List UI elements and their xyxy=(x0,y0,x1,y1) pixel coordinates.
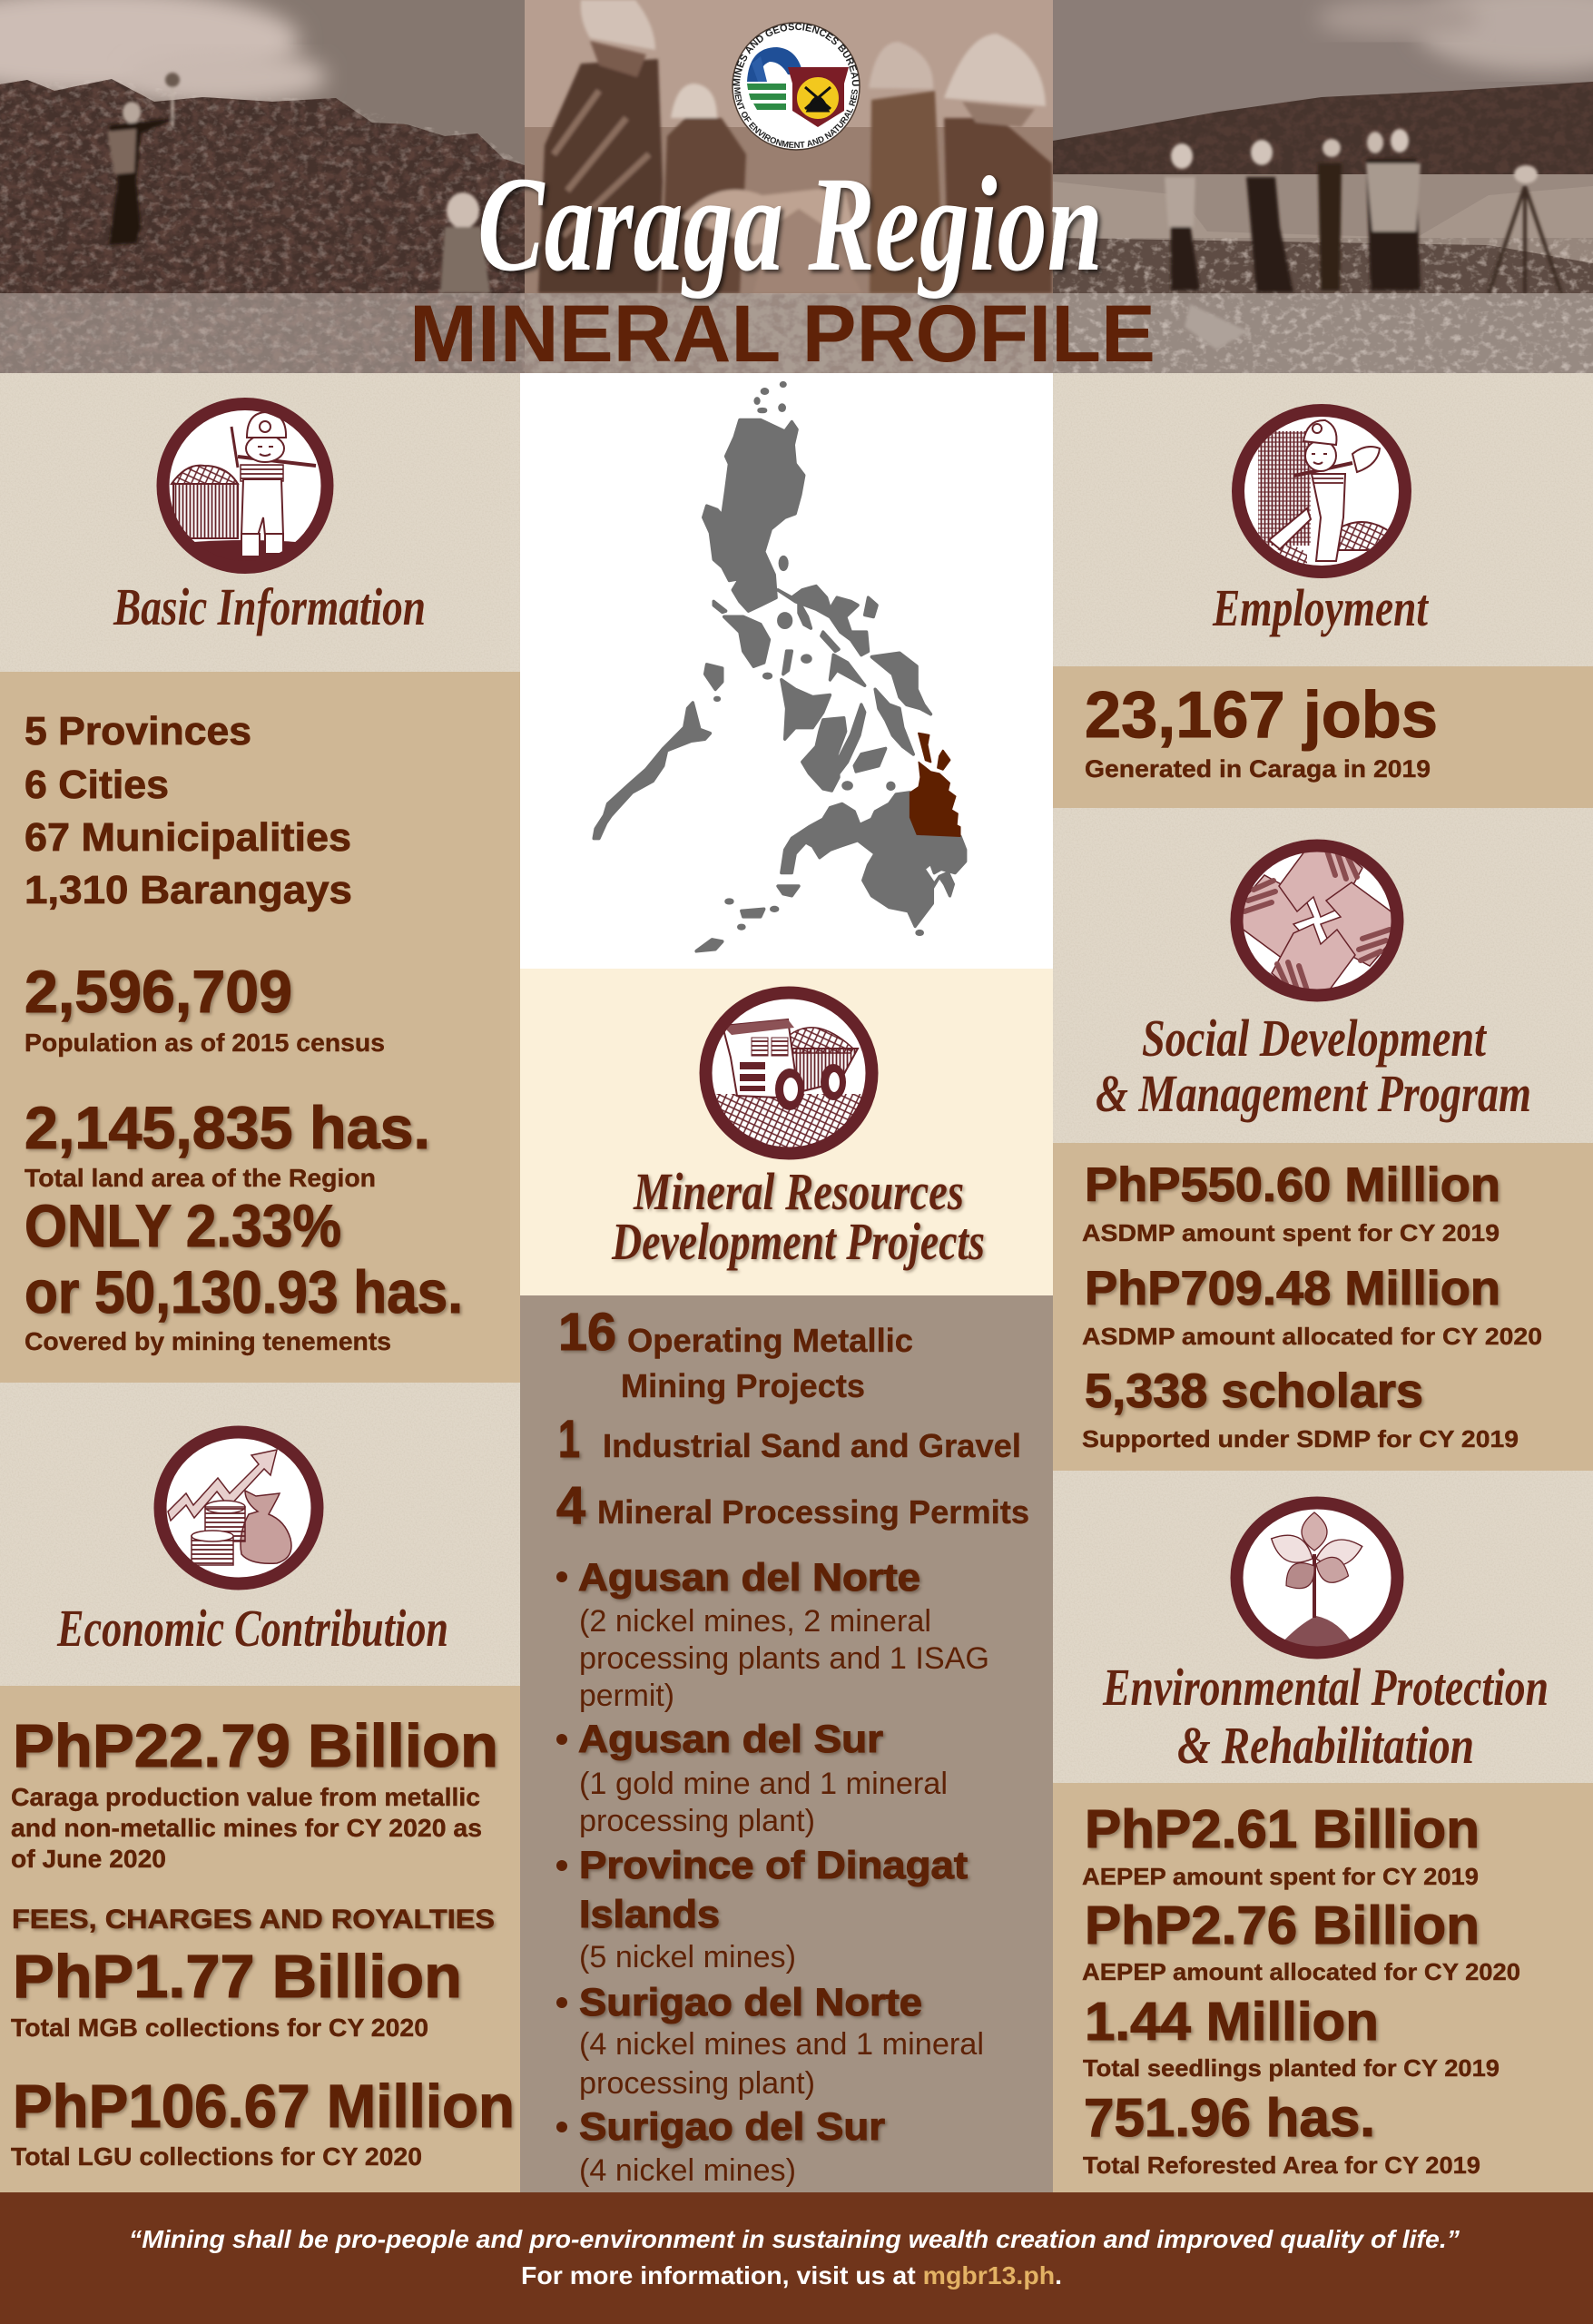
stat: AEPEP spent: AEPEP amount spent for CY 2019 xyxy=(1082,1863,1479,1890)
list: Province of Dinagat Islands xyxy=(556,1844,968,1974)
heading: Social Development & Management Program xyxy=(1096,1009,1531,1123)
stat: LGU collections xyxy=(11,2073,515,2171)
stat: population xyxy=(25,958,385,1057)
logo: MGB and DENR seal: MINES AND GEOSCIENCES BUREAU xyxy=(733,23,859,86)
list: Agusan del Norte: permit) xyxy=(579,1679,674,1713)
stat: seedlings planted: 1.44 Million xyxy=(1085,1992,1379,2052)
stat: MGB collections: Total MGB collections for CY 2020 xyxy=(11,2014,428,2042)
stat: mining tenements: Covered by mining tenements xyxy=(25,1327,391,1355)
list: Agusan del Norte: Agusan del Norte xyxy=(578,1556,920,1600)
text: administrative counts xyxy=(25,709,352,912)
list: Province of Dinagat Islands: Province of Dinagat xyxy=(579,1844,968,1887)
list: Agusan del Norte: processing plants and 1 ISAG xyxy=(579,1641,989,1676)
stat: ASDMP allocated: PhP709.48 Million xyxy=(1085,1262,1500,1315)
stat: ASDMP allocated xyxy=(1082,1262,1542,1350)
stat: population: 2,596,709 xyxy=(25,958,292,1025)
stat: AEPEP spent: PhP2.61 Billion xyxy=(1085,1799,1480,1859)
stat: ASDMP spent xyxy=(1082,1158,1500,1246)
stat: mining tenements: or 50,130.93 has. xyxy=(25,1258,463,1325)
stat: reforested area: Total Reforested Area for CY 2019 xyxy=(1083,2152,1480,2179)
stat: metallic mining projects: 16 xyxy=(558,1303,616,1362)
stat: sand and gravel xyxy=(558,1410,1021,1469)
stat: AEPEP allocated: AEPEP amount allocated for CY 2020 xyxy=(1082,1958,1520,1985)
stat: land area xyxy=(25,1094,430,1192)
stat: sand and gravel: 1 xyxy=(558,1410,580,1469)
list: Surigao del Norte: processing plant) xyxy=(579,2066,815,2101)
list: Agusan del Norte xyxy=(556,1556,989,1713)
title: Caraga Region: Caraga Region xyxy=(477,149,1103,300)
list: Surigao del Sur: Surigao del Sur xyxy=(579,2105,885,2149)
list: Surigao del Norte xyxy=(556,1981,984,2101)
panel: social development facts xyxy=(1053,1143,1593,1471)
icon: clasped hands xyxy=(1236,844,1398,997)
icon: seedling on soil mound xyxy=(1236,1503,1398,1657)
panel: economic contribution facts xyxy=(0,1686,520,2192)
stat: processing permits: 4 xyxy=(556,1476,585,1535)
panel: mineral resources development projects header xyxy=(520,969,1053,1295)
map: Philippines with Caraga highlighted xyxy=(520,373,1053,969)
list: Agusan del Sur: processing plant) xyxy=(579,1804,815,1838)
icon: rising arrow, coins and money bag xyxy=(160,1433,318,1583)
stat: scholars: 5,338 scholars xyxy=(1085,1364,1423,1418)
heading: Environmental Protection & Rehabilitation xyxy=(1102,1658,1549,1775)
stat: reforested area: 751.96 has. xyxy=(1084,2088,1375,2148)
list: Agusan del Norte: (2 nickel mines, 2 mineral xyxy=(579,1604,931,1639)
stat: AEPEP allocated: PhP2.76 Billion xyxy=(1085,1896,1480,1955)
title: Mineral Profile: MINERAL PROFILE xyxy=(409,288,1155,379)
panel: basic information facts xyxy=(0,672,520,1383)
footer: quote and website xyxy=(0,2192,1593,2324)
stat: sand and gravel: Industrial Sand and Gravel xyxy=(603,1427,1021,1464)
stat: production value: of June 2020 xyxy=(11,1845,166,1873)
banner: photo header xyxy=(0,0,1593,379)
photo: surveyor on rock pile xyxy=(0,0,525,373)
caption: jobs: Generated in Caraga in 2019 xyxy=(1085,755,1431,783)
stat: mining tenements: ONLY 2.33% xyxy=(25,1192,341,1259)
panel: social development header xyxy=(1053,808,1593,1143)
stat: seedlings planted xyxy=(1083,1992,1500,2082)
panel: environmental protection facts xyxy=(1053,1783,1593,2192)
stat: production value xyxy=(11,1712,498,1873)
icon: miner with shovel and wheelbarrow xyxy=(1238,410,1405,572)
heading: Employment: Employment xyxy=(1212,578,1429,637)
list: Surigao del Sur xyxy=(556,2105,885,2188)
panel: mineral resources facts xyxy=(520,1295,1053,2192)
stat: production value: Caraga production value from metallic xyxy=(11,1783,480,1811)
heading: Mineral Resources Development Projects: Mineral Resources xyxy=(633,1162,964,1221)
stat: LGU collections: Total LGU collections for CY 2020 xyxy=(11,2142,422,2171)
list: Surigao del Norte: (4 nickel mines and 1 mineral xyxy=(579,2027,984,2062)
text: administrative counts: 67 Municipalities xyxy=(25,815,351,860)
stat: metallic mining projects xyxy=(558,1303,913,1404)
list: Province of Dinagat Islands: Islands xyxy=(579,1893,720,1936)
list: Agusan del Sur: Agusan del Sur xyxy=(578,1718,883,1761)
text: administrative counts: 5 Provinces xyxy=(25,709,251,753)
text: administrative counts: 1,310 Barangays xyxy=(25,868,352,912)
list: Agusan del Sur: (1 gold mine and 1 mineral xyxy=(579,1767,948,1801)
stat: metallic mining projects: Mining Projects xyxy=(621,1367,865,1404)
stat: ASDMP spent: PhP550.60 Million xyxy=(1085,1158,1500,1212)
stat: metallic mining projects: Operating Metallic xyxy=(627,1322,913,1359)
heading: Mineral Resources Development Projects: Development Projects xyxy=(611,1212,985,1271)
stat: processing permits: Mineral Processing Permits xyxy=(597,1493,1029,1531)
subheading: fees, charges and royalties: FEES, CHARGES AND ROYALTIES xyxy=(12,1905,495,1935)
icon: dump truck xyxy=(706,993,871,1153)
panel: basic information header xyxy=(0,373,520,672)
heading: Mineral Resources Development Projects xyxy=(611,1162,985,1271)
stat: scholars: Supported under SDMP for CY 2019 xyxy=(1082,1425,1519,1452)
list: Surigao del Norte: Surigao del Norte xyxy=(579,1981,922,2024)
stat: ASDMP allocated: ASDMP amount allocated for CY 2020 xyxy=(1082,1323,1542,1350)
panel: employment header xyxy=(1053,373,1593,666)
list: Agusan del Sur xyxy=(556,1718,948,1838)
quote: “Mining shall be pro-people and pro-environment in sustaining wealth creation and improved quality of life.” xyxy=(129,2225,1460,2253)
text: administrative counts: 6 Cities xyxy=(25,763,169,807)
stat: ASDMP spent: ASDMP amount spent for CY 2019 xyxy=(1082,1219,1500,1246)
website line: For more information, visit us at mgbr13.ph. xyxy=(521,2261,1062,2290)
stat: population: Population as of 2015 census xyxy=(25,1029,385,1057)
stat: jobs: 23,167 jobs xyxy=(1085,679,1438,752)
stat: MGB collections: PhP1.77 Billion xyxy=(13,1943,462,2011)
photo: survey team on site xyxy=(1053,0,1593,373)
panel: economic contribution header xyxy=(0,1383,520,1686)
heading: Economic Contribution: Economic Contribution xyxy=(56,1599,448,1658)
stat: LGU collections: PhP106.67 Million xyxy=(13,2073,515,2141)
logo: MGB and DENR seal xyxy=(732,22,860,151)
translucent title band xyxy=(0,293,1593,373)
stat: production value: PhP22.79 Billion xyxy=(13,1712,498,1780)
photo: miners in hard hats xyxy=(525,0,1053,373)
stat: scholars xyxy=(1082,1364,1519,1452)
stat: MGB collections xyxy=(11,1943,462,2042)
list: Province of Dinagat Islands: (5 nickel mines) xyxy=(579,1940,796,1974)
stat: land area: 2,145,835 has. xyxy=(25,1094,430,1161)
stat: land area: Total land area of the Region xyxy=(25,1164,376,1192)
stat: processing permits xyxy=(556,1476,1029,1535)
heading: Basic Information: Basic Information xyxy=(113,577,426,636)
panel: employment facts xyxy=(1053,666,1593,808)
panel: environmental protection header xyxy=(1053,1471,1593,1783)
list: Surigao del Sur: (4 nickel mines) xyxy=(579,2153,796,2188)
heading: Environmental Protection & Rehabilitation: & Rehabilitation xyxy=(1177,1716,1474,1775)
stat: mining tenements xyxy=(25,1192,463,1355)
stat: reforested area xyxy=(1083,2088,1480,2179)
icon: miner with mine cart xyxy=(163,404,327,567)
stat: AEPEP allocated xyxy=(1082,1896,1520,1985)
stat: seedlings planted: Total seedlings planted for CY 2019 xyxy=(1083,2054,1500,2082)
heading: Social Development & Management Program: Social Development xyxy=(1142,1009,1488,1068)
stat: AEPEP spent xyxy=(1082,1799,1480,1890)
stat: production value: and non-metallic mines for CY 2020 as xyxy=(11,1814,482,1842)
